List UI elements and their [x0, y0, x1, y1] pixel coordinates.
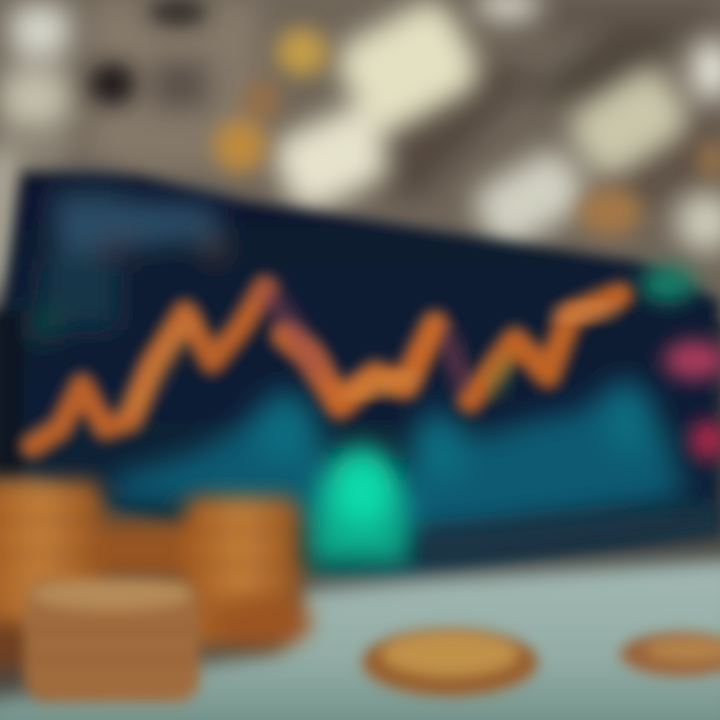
- lower screen ticks: [420, 505, 720, 570]
- teal area chart: [110, 375, 685, 535]
- table surface: [0, 558, 720, 720]
- data table on screen: [30, 180, 229, 340]
- line chart: [32, 288, 620, 446]
- chart screen: [0, 172, 720, 578]
- coin stripes: [0, 520, 300, 600]
- coin stacks: [0, 480, 312, 702]
- ceiling background: [0, 0, 720, 320]
- green mound: [306, 445, 412, 565]
- ceiling lights: [0, 0, 720, 290]
- coins on table: [362, 628, 720, 696]
- right side indicators: [640, 266, 720, 460]
